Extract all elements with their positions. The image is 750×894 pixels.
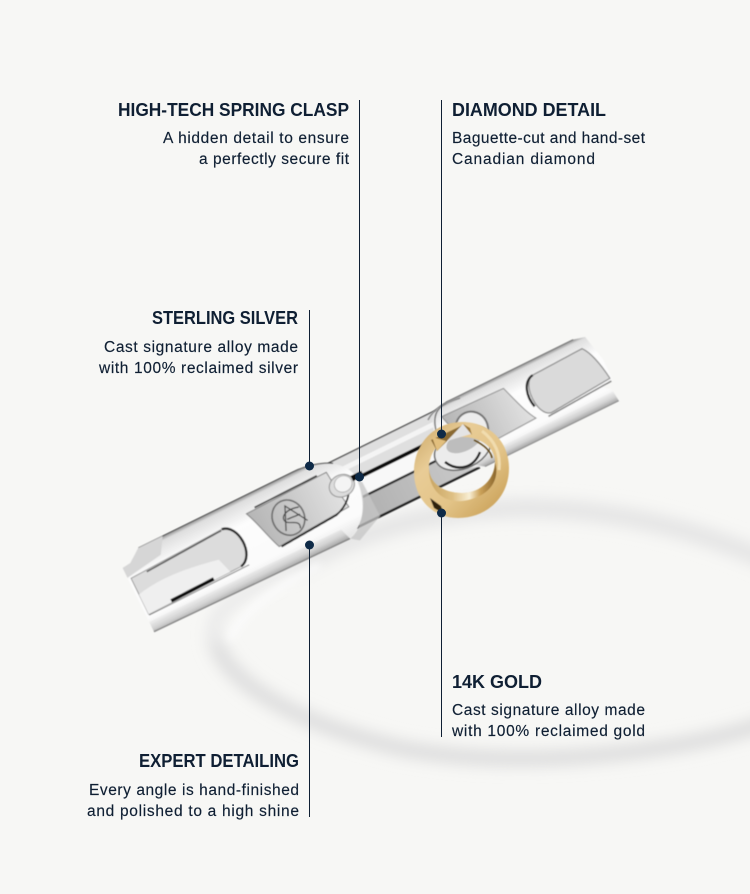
callout: expert detailing (87, 751, 299, 820)
callout: expert detailing: EXPERT DETAILING (139, 751, 299, 771)
right loop (427, 398, 499, 479)
left link (118, 446, 386, 640)
callout: diamond detail: Baguette-cut and hand-set (452, 130, 646, 147)
callout: high-tech spring clasp: a perfectly secure fit (199, 151, 350, 168)
callout: 14k gold: Cast signature alloy made (452, 702, 645, 719)
callout: sterling silver: with 100% reclaimed silver (98, 360, 298, 377)
clasp knob (325, 465, 368, 501)
callout: 14k gold (451, 672, 645, 740)
callout: sterling silver (98, 308, 298, 377)
callout: expert detailing: Every angle is hand-finished (89, 782, 299, 799)
callout: sterling silver: STERLING SILVER (152, 308, 298, 328)
callout: diamond detail (452, 100, 646, 168)
bracelet (118, 327, 627, 640)
right recess (522, 343, 612, 417)
callout: sterling silver: Cast signature alloy made (104, 339, 298, 356)
callout: 14k gold: with 100% reclaimed gold (451, 723, 645, 740)
bracelet shadow (213, 508, 750, 759)
callout: diamond detail: Canadian diamond (452, 151, 595, 168)
callout: high-tech spring clasp (118, 100, 350, 168)
prong shading (118, 536, 172, 578)
callout: high-tech spring clasp: HIGH-TECH SPRING CLASP (118, 100, 349, 120)
gold ring (414, 422, 509, 518)
recess (129, 523, 253, 614)
callout: 14k gold: 14K GOLD (452, 672, 542, 692)
dark clasp inner edge (271, 487, 359, 547)
right link (424, 332, 622, 480)
central bar (314, 403, 480, 535)
callout: diamond detail: DIAMOND DETAIL (452, 100, 606, 120)
right plate (442, 380, 537, 458)
clasp hook (328, 477, 386, 544)
leader lines (310, 100, 442, 817)
logo (266, 494, 311, 541)
marker dots (305, 430, 446, 550)
left lower lip (149, 526, 350, 634)
engraved plate (246, 470, 351, 553)
callout: expert detailing: and polished to a high shine (87, 803, 299, 820)
callout: high-tech spring clasp: A hidden detail to ensure (163, 130, 349, 147)
right lower lip (467, 391, 619, 473)
